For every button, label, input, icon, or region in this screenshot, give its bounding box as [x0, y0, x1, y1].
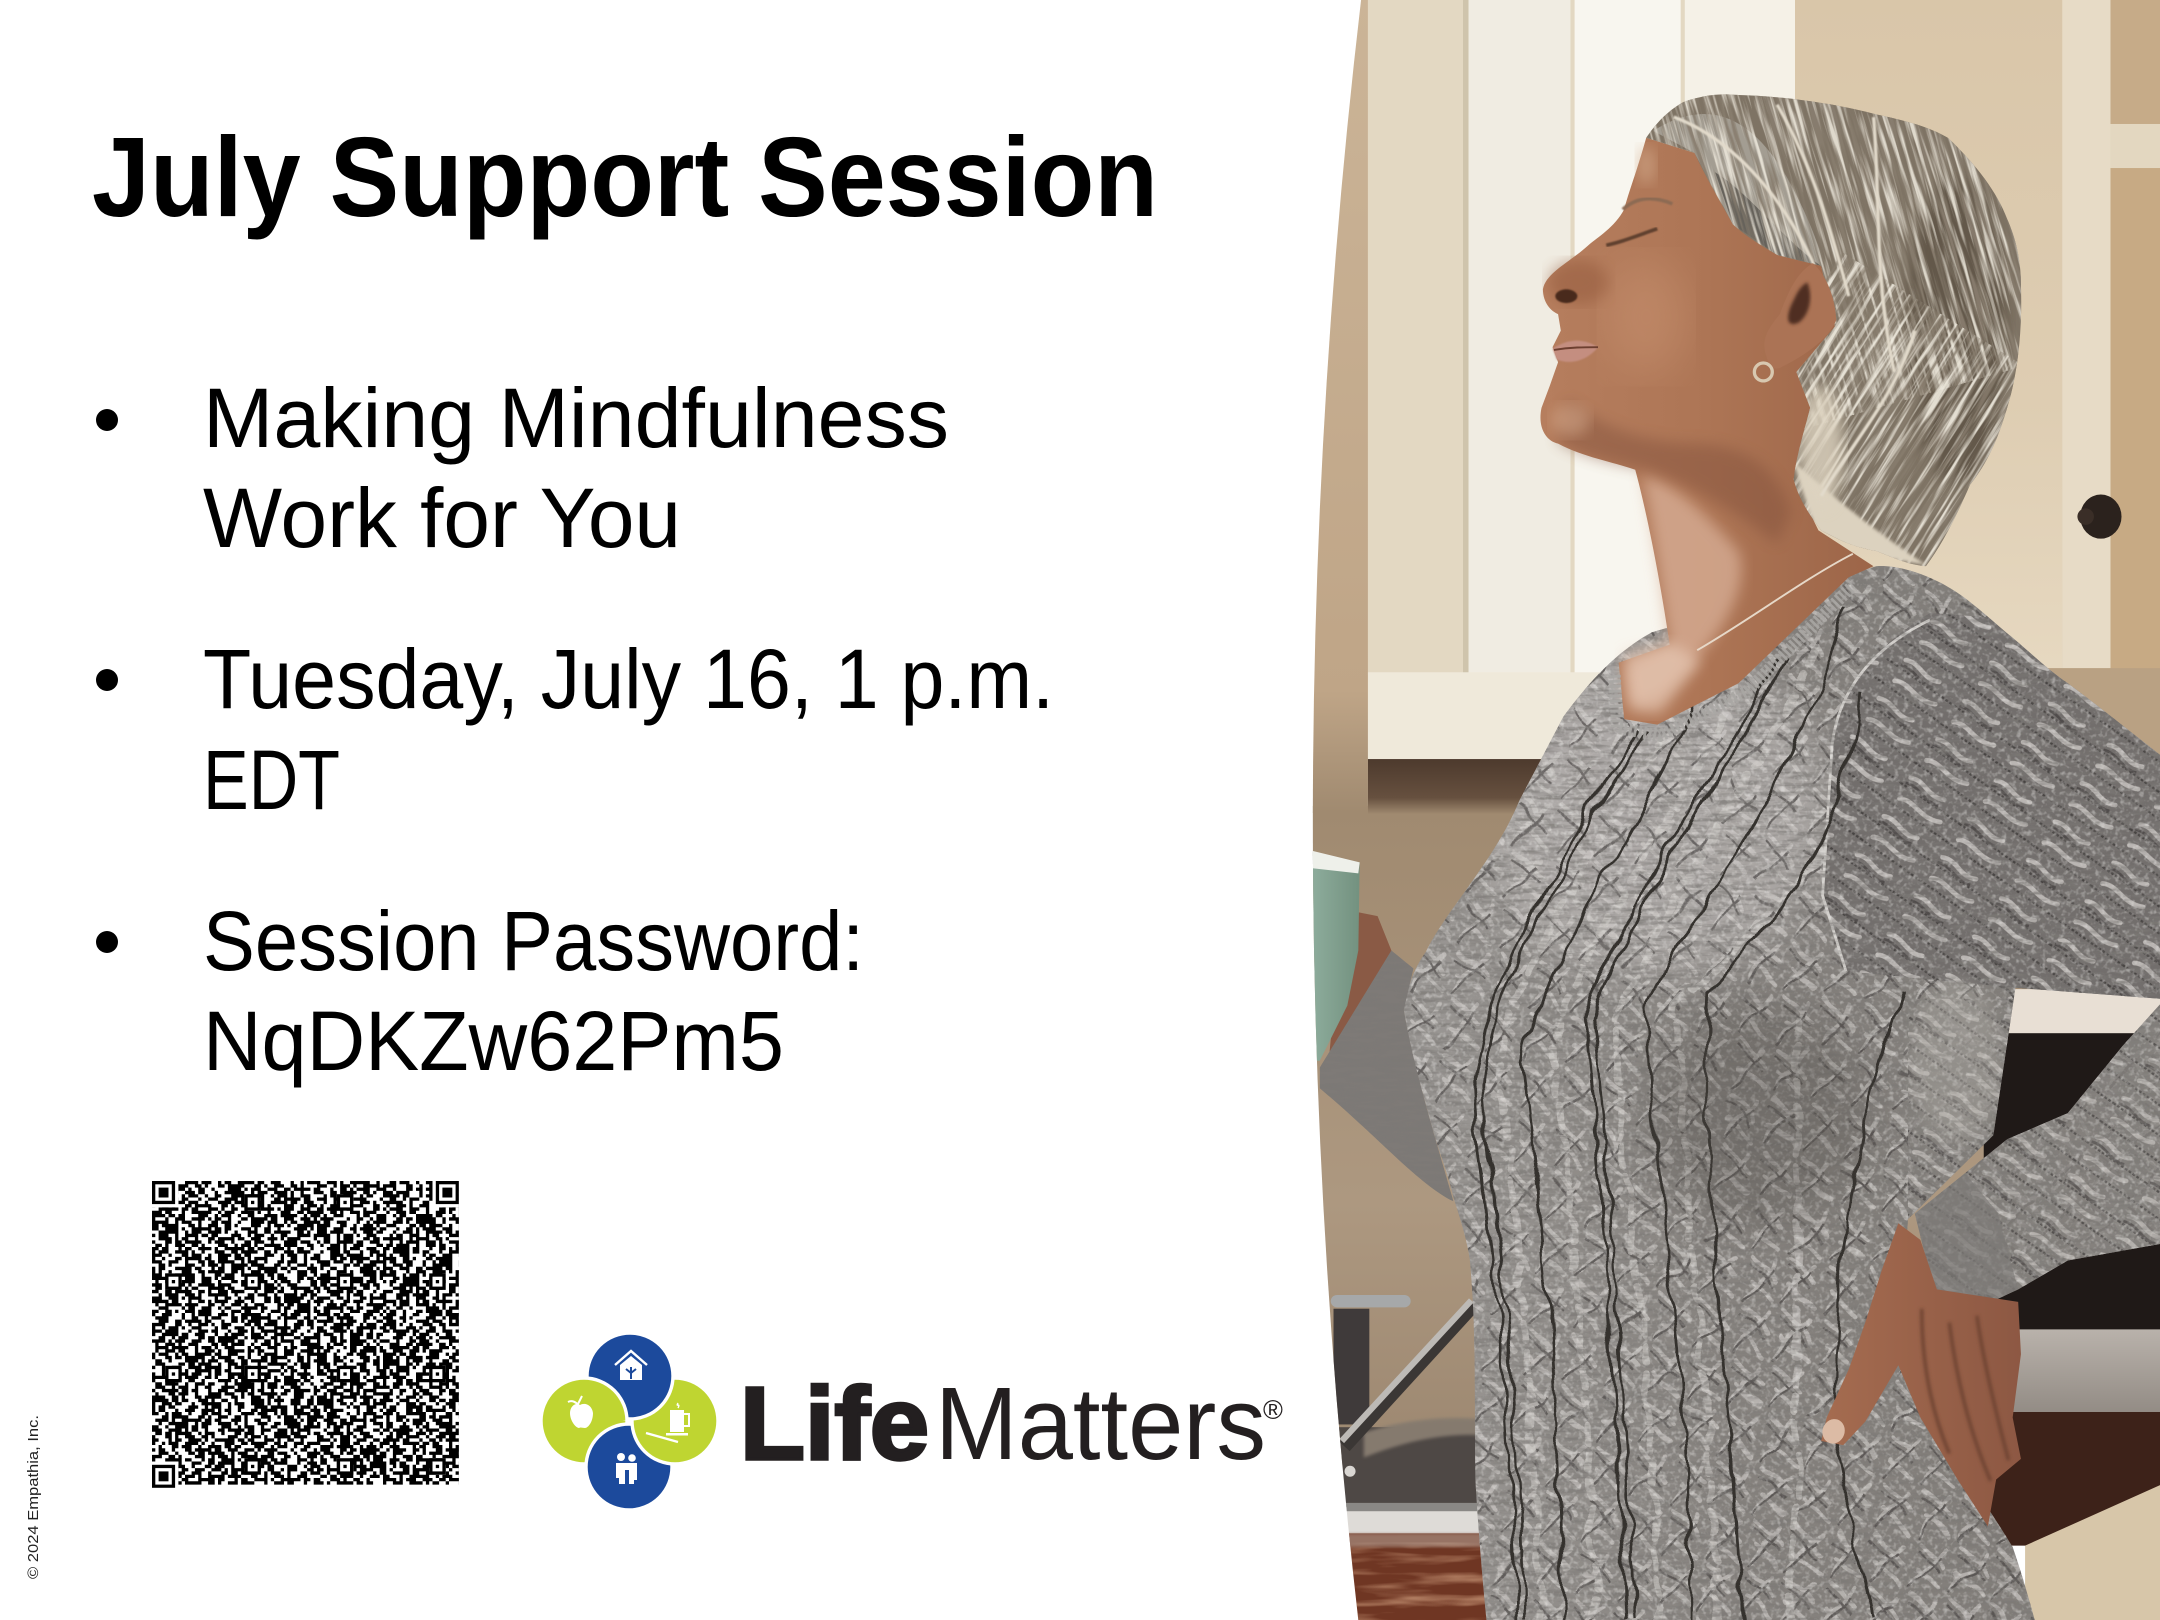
- nose shadow: [1548, 260, 1609, 304]
- icon: two people: [616, 1453, 637, 1484]
- kitchen background: [1295, 0, 2160, 1620]
- ear and earring: [1754, 263, 1836, 381]
- left sleeve cuff: [1320, 950, 1454, 1201]
- forearm: [1908, 999, 2160, 1302]
- sweater: [1364, 537, 2160, 1620]
- sink: [1339, 1417, 1479, 1533]
- faucet: [1331, 1295, 1474, 1477]
- lips: [1553, 341, 1598, 362]
- lower strands: [1695, 252, 2145, 676]
- hair: [1529, 0, 2145, 676]
- shaded mid torso: [1646, 1006, 1867, 1226]
- title: July Support Session: [92, 114, 1158, 240]
- grey temple sweep: [1653, 114, 1822, 266]
- bullet item: session password: NqDKZw62Pm5: [203, 994, 784, 1088]
- light lower sweep: [1794, 461, 1926, 565]
- cabinet knob: [2077, 495, 2122, 539]
- bullet item: date and time: Tuesday, July 16, 1 p.m.: [203, 632, 1054, 726]
- icon: apple: [568, 1396, 593, 1428]
- light on neck and chest: [1626, 475, 1741, 705]
- eyebrow and closed eye: [1623, 199, 1672, 209]
- bullet item: session password: [96, 894, 864, 1088]
- necklace: [1697, 554, 1853, 650]
- cable ribs: [1474, 606, 1901, 1620]
- copyright notice: © 2024 Empathia, Inc.: [26, 1415, 42, 1579]
- logo wordmark: Matters: [935, 1366, 1266, 1481]
- skin: face and neck: [1540, 138, 1874, 725]
- hand on lower back: [1819, 1223, 2021, 1526]
- bullet item: session topic: Work for You: [203, 471, 681, 565]
- wooden countertop: [1349, 1532, 1486, 1620]
- QR code: [145, 1178, 466, 1491]
- LifeMatters logo: [541, 1333, 1283, 1510]
- logo wordmark: ®: [1263, 1395, 1283, 1425]
- bullet item: date and time: [96, 632, 1054, 827]
- logo wordmark: Life: [740, 1366, 929, 1481]
- icon: steaming mug on saucer: [646, 1403, 689, 1442]
- mug and hand: [1309, 850, 1394, 1061]
- raglan seam: [1823, 620, 1930, 971]
- upper strands: [1529, 0, 2120, 475]
- rib cuff: [1915, 1171, 2018, 1305]
- photo: woman stretching her back in a kitchen: [1295, 0, 2160, 1620]
- shoulder and upper arm, darker: [1823, 613, 2160, 1002]
- light upper chest: [1474, 647, 1832, 978]
- sweater neckline rib: [1615, 585, 1853, 736]
- bullet item: session password: Session Password:: [203, 894, 864, 988]
- bullet item: session topic: Making Mindfulness: [203, 371, 949, 465]
- braided cables: [1499, 647, 1860, 1620]
- logo wordmark: [740, 1366, 1283, 1481]
- bullet item: session topic: [96, 371, 949, 565]
- bullet list: [96, 371, 1054, 1088]
- bullet item: date and time: EDT: [203, 733, 340, 827]
- logo mark: four interlocking circles: [541, 1333, 718, 1510]
- nostril: [1555, 289, 1577, 303]
- icon: house with plant: [615, 1351, 647, 1380]
